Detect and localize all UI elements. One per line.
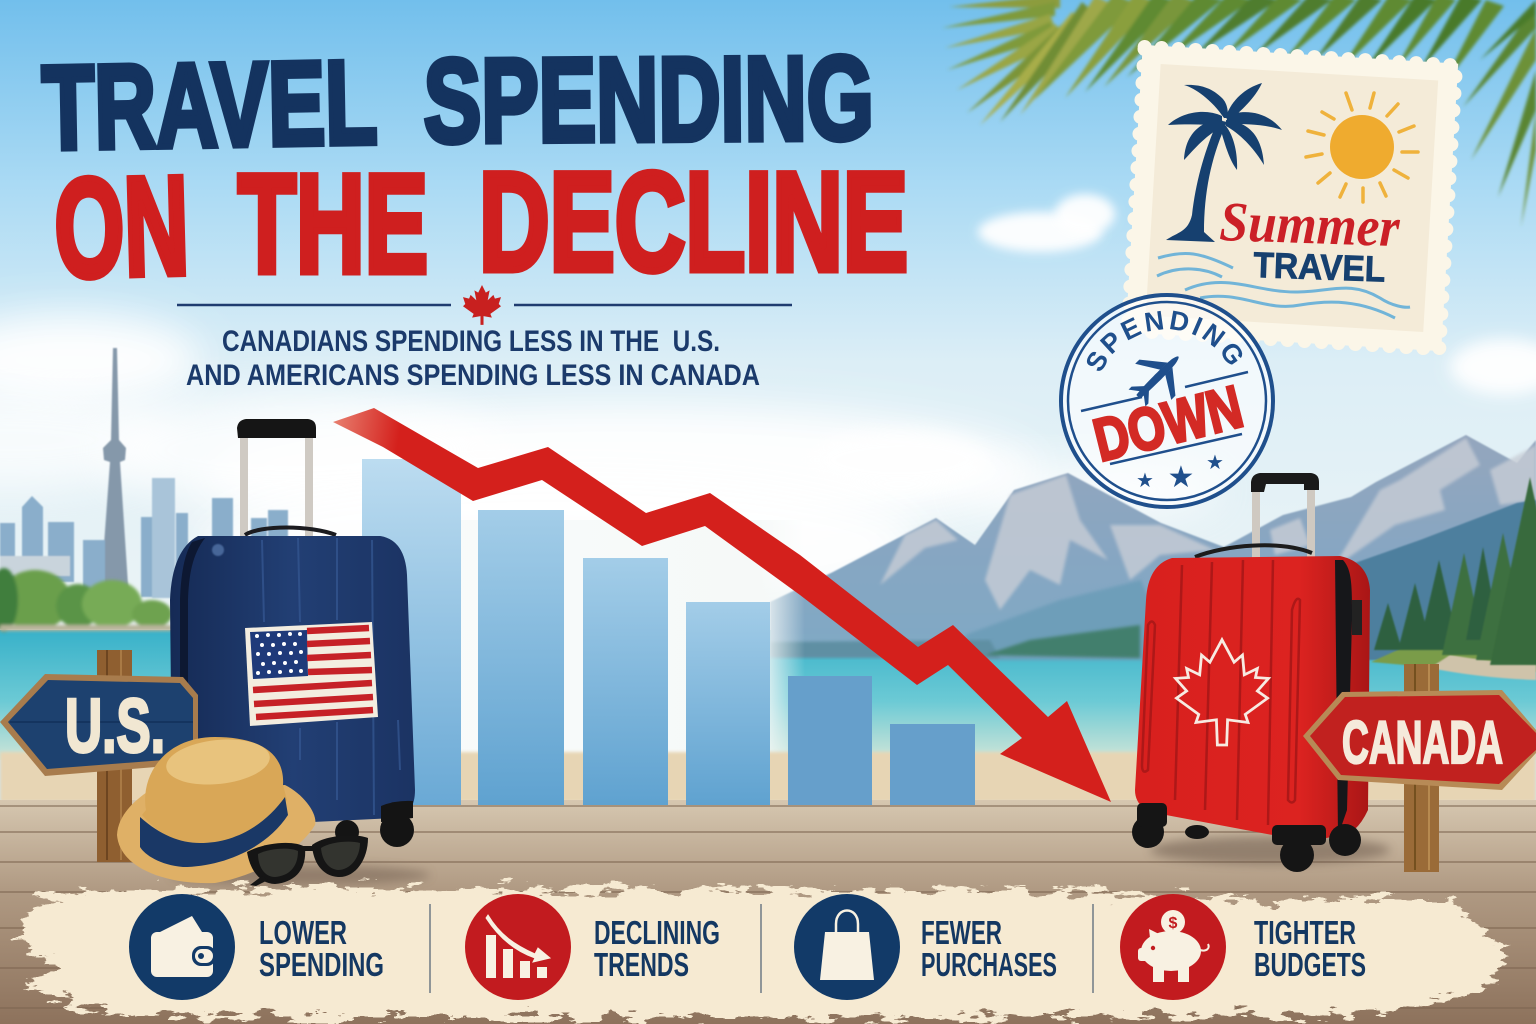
skyline: Toronto with CN Tower: [0, 348, 288, 600]
label: [594, 914, 720, 983]
wheels: [1132, 803, 1361, 872]
label: DECLINING: [594, 914, 720, 951]
suitcase body: [1135, 556, 1370, 842]
sign board: [0, 674, 198, 776]
stamp rules: [1081, 372, 1248, 464]
stamp waves: [1157, 253, 1410, 318]
icon: palm tree: [1166, 83, 1282, 242]
arrow: downward trend: [333, 408, 1111, 802]
sign label: U.S.: [65, 684, 165, 769]
tree line right: [1371, 477, 1536, 680]
bar chart: declining spending: [362, 459, 975, 805]
US suitcase: [170, 419, 415, 847]
suitcase handle: [237, 419, 336, 536]
subtitle: CANADIANS SPENDING LESS IN THE U.S.: [222, 325, 720, 358]
title line 1: SPENDING: [423, 32, 874, 168]
label: TIGHTER: [1254, 914, 1356, 951]
label: SPENDING: [259, 946, 384, 983]
icon: shopping bag: [820, 910, 874, 980]
sunglasses: [247, 835, 368, 886]
stamp stars: ★: [1168, 461, 1194, 494]
label: [1254, 914, 1366, 983]
mountains: [770, 435, 1536, 660]
stamp text: SPENDING: SPENDING: [1086, 310, 1242, 371]
divider with maple leaf: [177, 285, 792, 325]
icon: wallet: [151, 916, 216, 977]
label: LOWER: [259, 914, 347, 951]
straw hat: [117, 735, 315, 883]
clouds: [0, 194, 1536, 615]
item: lower spending: [129, 894, 384, 1000]
icon: sun: [1306, 93, 1418, 202]
label: TRENDS: [594, 946, 689, 983]
water: [0, 630, 1536, 760]
icon: piggy bank: $: [1169, 915, 1178, 932]
Canada suitcase: [1132, 473, 1370, 872]
shoreline trees left: [0, 568, 172, 632]
stamp stars: ★: [1136, 470, 1154, 492]
label: BUDGETS: [1254, 946, 1366, 983]
title line 2: [53, 143, 908, 307]
sign post: [97, 650, 132, 862]
stamp stars: ★: [1206, 452, 1224, 474]
label: FEWER: [921, 914, 1002, 951]
flag sticker: [245, 622, 378, 726]
label: PURCHASES: [921, 946, 1057, 983]
wheels: [335, 801, 414, 847]
item: declining trends: [465, 894, 720, 1000]
stamp script: Summer: Summer: [1219, 191, 1402, 259]
US sign and post: [0, 650, 198, 862]
title line 1: [41, 32, 874, 175]
sand beach: [0, 752, 1536, 802]
suitcase handle: [1195, 473, 1319, 560]
haze over water behind chart: [415, 520, 805, 805]
icon: plane: [1119, 339, 1196, 416]
background: sky: [0, 0, 1536, 660]
icon: piggy bank: [1138, 910, 1209, 982]
stamp stars: [1136, 452, 1224, 494]
postage stamp: summer travel: [1126, 45, 1458, 351]
title line 2: THE: [238, 145, 428, 302]
suitcase body: [170, 536, 415, 828]
icon: maple leaf outline: [1176, 640, 1268, 745]
Canada sign and post: [1303, 664, 1536, 872]
sign board: [1303, 690, 1536, 790]
stamp label: TRAVEL: TRAVEL: [1253, 244, 1386, 290]
title line 2: ON: [53, 146, 191, 307]
label: [259, 914, 384, 983]
wood deck: [0, 800, 1536, 1024]
stamp word: DOWN: DOWN: [1087, 373, 1249, 474]
bottom strip: [15, 888, 1505, 1018]
item: fewer purchases: [794, 894, 1057, 1000]
round stamp: spending down: [1059, 293, 1275, 509]
label: [921, 914, 1057, 983]
subtitle: AND AMERICANS SPENDING LESS IN CANADA: [186, 359, 760, 392]
palm fronds: [942, 0, 1536, 227]
item: tighter budgets: [1120, 894, 1366, 1000]
title line 2: DECLINE: [479, 143, 908, 300]
subtitle: [186, 325, 760, 392]
sign post: [1404, 664, 1439, 872]
title line 1: TRAVEL: [41, 36, 378, 175]
icon: falling bars: [486, 915, 550, 978]
